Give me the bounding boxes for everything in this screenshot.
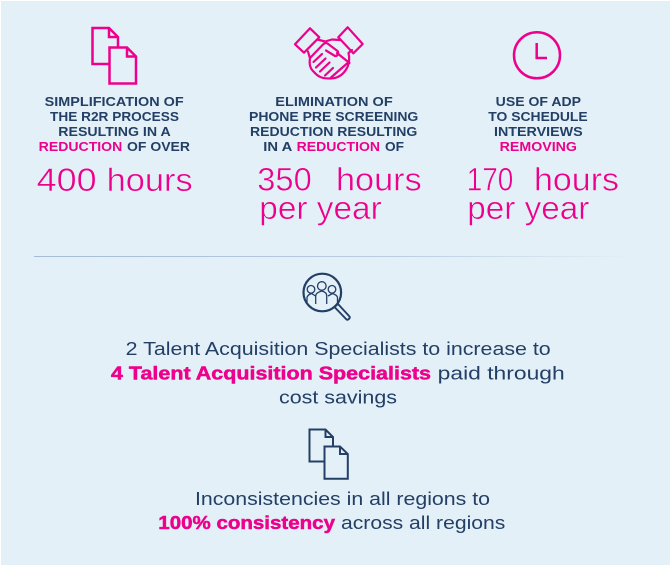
text: talent acquisition specialists: 4 Talent Acquisition Specialists <box>111 362 431 383</box>
icon: navy documents <box>310 430 348 479</box>
heading: simplification of R2R: SIMPLIFICATION OF <box>45 94 184 109</box>
icon: magnifier with people <box>304 274 350 320</box>
text: talent acquisition specialists: 2 Talent Acquisition Specialists to increase to <box>126 338 551 359</box>
heading: elimination of phone pre screening: OF <box>385 139 404 154</box>
stat: 400 hours: 400 <box>37 162 97 198</box>
heading: elimination of phone pre screening: ELIMINATION OF <box>275 94 393 109</box>
heading: elimination of phone pre screening: REDUCTION RESULTING <box>250 124 417 139</box>
heading: use of ADP <box>488 94 588 154</box>
stat: 350 hours per year: 350 <box>257 162 312 198</box>
stat: 170 hours per year <box>467 162 619 226</box>
icon: handshake <box>295 27 363 78</box>
heading: use of ADP: INTERVIEWS <box>494 124 583 139</box>
column 2: phone pre screening <box>249 27 422 226</box>
stat: 400 hours <box>37 162 193 198</box>
text: consistency across regions: 100% consistency <box>158 512 336 533</box>
heading: simplification of R2R <box>39 94 191 154</box>
stat: 400 hours: hours <box>107 162 193 198</box>
heading: simplification of R2R: REDUCTION <box>39 139 122 154</box>
stat: 350 hours per year: hours <box>336 162 422 198</box>
heading: use of ADP: TO SCHEDULE <box>488 109 588 124</box>
heading: simplification of R2R: OF OVER <box>127 139 191 154</box>
column 3: ADP scheduling <box>467 32 619 226</box>
stat: 350 hours per year <box>257 162 422 226</box>
stat: 350 hours per year: per year <box>259 190 382 226</box>
heading: elimination of phone pre screening: IN A <box>263 139 293 154</box>
text: consistency across regions: Inconsistencies in all regions to <box>195 488 490 509</box>
stat: 170 hours per year: per year <box>467 190 590 226</box>
stat: 170 hours per year: hours <box>534 162 619 198</box>
heading: simplification of R2R: RESULTING IN A <box>58 124 171 139</box>
text: talent acquisition specialists: cost savings <box>279 386 397 407</box>
heading: elimination of phone pre screening: REDUCTION <box>297 139 380 154</box>
text: talent acquisition specialists: paid through <box>438 362 565 383</box>
column 1: R2R process <box>37 28 193 198</box>
heading: elimination of phone pre screening: PHONE PRE SCREENING <box>249 109 418 124</box>
text: consistency across regions: across all regions <box>341 512 505 533</box>
icon: pink documents <box>92 28 136 84</box>
text: talent acquisition specialists <box>111 338 565 407</box>
icon: clock <box>514 32 560 78</box>
text: consistency across regions <box>158 488 505 533</box>
heading: simplification of R2R: THE R2R PROCESS <box>50 109 179 124</box>
heading: use of ADP: REMOVING <box>500 139 577 154</box>
heading: use of ADP: USE OF ADP <box>496 94 581 109</box>
heading: elimination of phone pre screening <box>249 94 418 154</box>
stat: 170 hours per year: 170 <box>467 162 513 198</box>
